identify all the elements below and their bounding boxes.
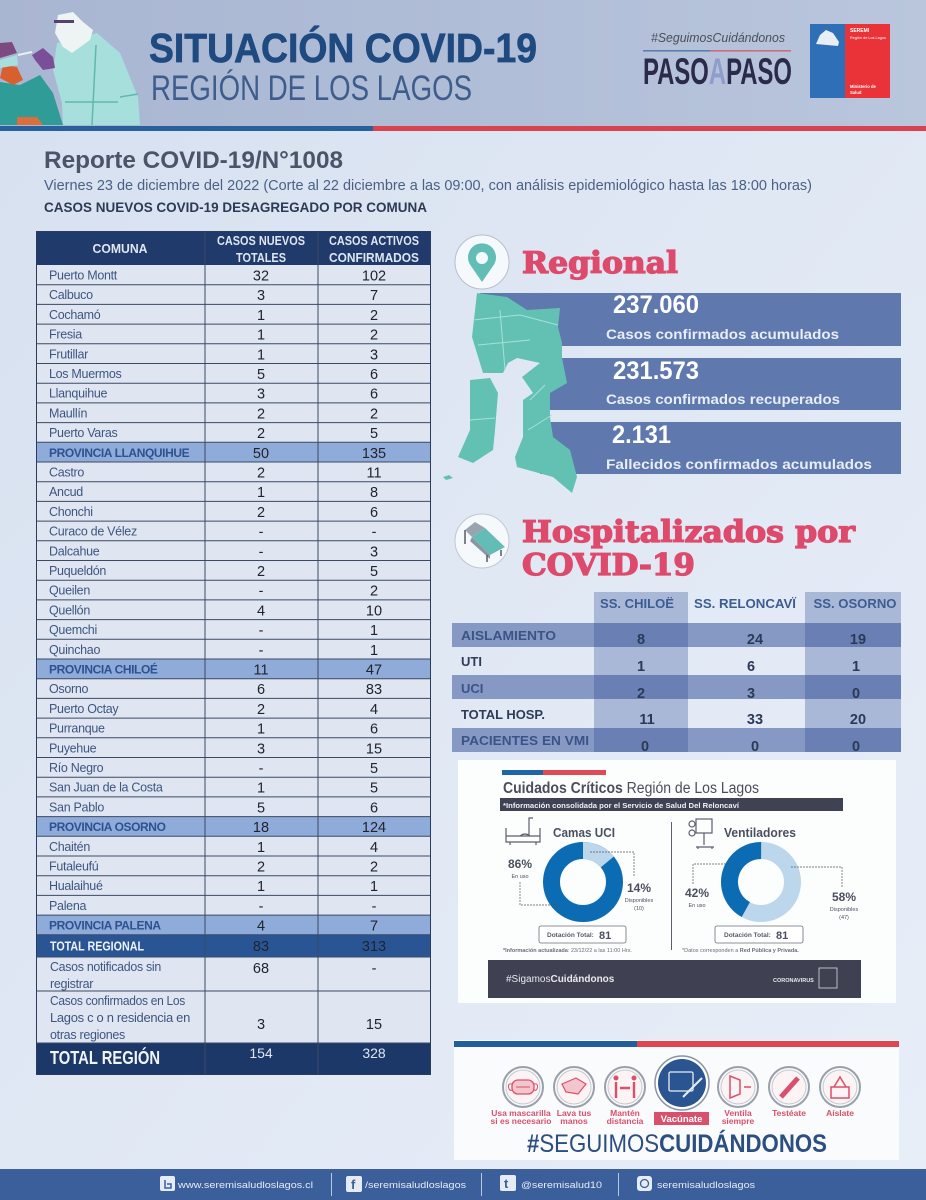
row: Cochamó: 1 (257, 308, 265, 324)
row: Ancud (49, 485, 378, 501)
title (149, 25, 537, 108)
table subtitle: CASOS NUEVOS COVID-19 DESAGREGADO POR COMUNA (44, 199, 427, 215)
stat bar: accumulated cases: 237.060 (613, 291, 699, 319)
row: San Pablo: San Pablo (49, 800, 104, 814)
row: UTI: 1 (637, 659, 645, 675)
callout: 58% available: (47) (839, 915, 849, 921)
row: Aislamiento: 19 (850, 632, 866, 648)
row: UCI: 0 (852, 686, 860, 702)
facebook: f (351, 1177, 356, 1192)
row: Quellón (49, 603, 382, 619)
row: Pacientes en VMI: PACIENTES EN VMI (461, 733, 589, 748)
row: Fresia: 2 (370, 328, 378, 344)
stat bar: deaths (540, 421, 901, 474)
stat bar: accumulated cases (480, 291, 901, 346)
row: Puerto Varas: Puerto Varas (49, 426, 117, 440)
row: Pacientes en VMI (461, 733, 860, 755)
measure labels: Testéate (772, 1108, 806, 1118)
row: Casos confirmados con residencia en otras regiones: 3 (257, 1017, 265, 1033)
row: San Juan de la Costa: San Juan de la Costa (49, 781, 163, 795)
row: Quellón: Quellón (49, 603, 90, 617)
row: Queilen (49, 584, 378, 600)
row: Quellón: 10 (366, 603, 382, 619)
table header: CONFIRMADOS (329, 251, 419, 265)
row: Provincia Osorno: 124 (362, 820, 386, 836)
heading: Hospitalizados por COVID-19: COVID-19 (522, 548, 695, 583)
row: Provincia Llanquihue (49, 446, 386, 462)
row: Puerto Montt (49, 268, 386, 284)
row: Futaleufú: 2 (257, 860, 265, 876)
row: Río Negro: 5 (370, 761, 378, 777)
row: Puqueldón: Puqueldón (49, 564, 106, 578)
row: Calbuco: Calbuco (49, 288, 93, 302)
total box: ICU beds: Dotación Total: (547, 932, 594, 939)
icon: mask (503, 1067, 543, 1107)
label: Camas UCI: Camas UCI (553, 826, 615, 840)
website: www.seremisaludloslagos.cl (177, 1180, 313, 1191)
callout: 58% available: 58% (832, 890, 856, 904)
row: Futaleufú: Futaleufú (49, 860, 99, 874)
row: Chaitén: 4 (370, 840, 378, 856)
row: Purranque: 6 (370, 722, 378, 738)
row: Casos confirmados con residencia en otras regiones (50, 994, 382, 1042)
row: Casos confirmados con residencia en otras regiones: otras regiones (50, 1028, 125, 1042)
measure labels: siempre (722, 1116, 755, 1126)
row: Cochamó (49, 308, 378, 324)
row: Los Muermos (49, 367, 378, 383)
footer: social links (0, 1169, 926, 1200)
stat bar: deaths: Fallecidos confirmados acumulados (606, 457, 872, 472)
row: Puerto Octay: Puerto Octay (49, 702, 119, 716)
row: Palena: Palena (49, 899, 86, 913)
stat bar: deaths: 2.131 (612, 421, 671, 449)
note bar: *Información consolidada por el Servicio de Salud Del Reloncaví (503, 801, 740, 810)
dark footer: CORONAVIRUS (773, 978, 814, 984)
icon: vaccine (655, 1056, 709, 1110)
instagram (637, 1176, 755, 1191)
row: UCI: 3 (747, 686, 755, 702)
row: Osorno: 83 (366, 682, 382, 698)
table header: CASOS NUEVOS (217, 234, 305, 248)
update note: *Información actualizada: 23/12/22 a las 11:00 Hrs. (503, 948, 632, 954)
callout: 14% available: 14% (627, 881, 651, 895)
row: Quemchi (49, 623, 378, 639)
measure labels: Aíslate (826, 1108, 854, 1118)
heading: Regional: Regional (522, 246, 678, 281)
row: Dalcahue (49, 544, 378, 560)
row: Los Muermos: 6 (370, 367, 378, 383)
row: Total región: 154 (249, 1045, 273, 1061)
row: Hualaihué: 1 (257, 879, 265, 895)
row: Osorno: 6 (257, 682, 265, 698)
hashtag: #SEGUIMOSCUIDÁNDONOS (527, 1129, 827, 1158)
row: San Juan de la Costa: 5 (370, 781, 378, 797)
row: Total región: TOTAL REGIÓN (50, 1047, 160, 1068)
row: Puerto Montt: Puerto Montt (49, 268, 118, 282)
row: Maullín: 2 (370, 406, 378, 422)
stat bar: recovered cases: 231.573 (613, 357, 699, 385)
row: Total hosp.: 33 (747, 712, 763, 728)
row: Frutillar: Frutillar (49, 347, 88, 361)
row: Hualaihué: Hualaihué (49, 879, 103, 893)
row: Fresia (49, 328, 378, 344)
row: Casos notificados sin registrar (50, 960, 377, 991)
logo: Seremi: SEREMI (850, 28, 870, 34)
donut: ICU beds (552, 850, 614, 914)
row: Purranque (49, 722, 378, 738)
row: Castro: 11 (366, 466, 382, 482)
row: Cochamó: 2 (370, 308, 378, 324)
panel: critical care (458, 760, 896, 1003)
stat bar: accumulated cases: Casos confirmados acumulados (606, 327, 839, 342)
row: Puerto Octay (49, 702, 378, 718)
row: Provincia Llanquihue: 135 (362, 446, 386, 462)
row: Castro: 2 (257, 466, 265, 482)
total box: ICU beds: 81 (599, 930, 611, 942)
row: UCI (461, 681, 860, 702)
row: Quemchi: Quemchi (49, 623, 97, 637)
twitter: @seremisalud10 (521, 1180, 602, 1191)
row: Pacientes en VMI: 0 (751, 739, 759, 755)
row: Aislamiento: 24 (747, 632, 763, 648)
row: Dalcahue: Dalcahue (49, 544, 100, 558)
row: Puerto Montt: 102 (362, 268, 386, 284)
row: Llanquihue (49, 387, 378, 403)
row: Total hosp.: TOTAL HOSP. (461, 707, 545, 722)
callout: 14% available (590, 852, 653, 912)
callout: 58% available: Disponibles (830, 907, 858, 913)
row: Purranque: 1 (257, 722, 265, 738)
row: Provincia Osorno (49, 820, 386, 836)
row: Total hosp.: 20 (850, 712, 866, 728)
row: Cochamó: Cochamó (49, 308, 101, 322)
icon: ventilate (718, 1067, 758, 1107)
row: Provincia Palena: 4 (257, 919, 265, 935)
row: Puerto Montt: 32 (253, 268, 269, 284)
facebook (346, 1176, 466, 1192)
callout: 86% in use: En uso (511, 874, 529, 880)
row: Chaitén: Chaitén (49, 840, 90, 854)
row: Chonchi (49, 505, 378, 521)
illustration: health workers (0, 12, 140, 125)
icon: location pin (455, 235, 509, 289)
panel: prevention measures (454, 1040, 899, 1160)
logo: Paso a Paso (643, 30, 792, 92)
row: Chonchi: Chonchi (49, 505, 93, 519)
logo: Paso a Paso: #SeguimosCuidándonos (651, 30, 785, 45)
row: Aislamiento (461, 628, 866, 648)
row: UTI: 6 (747, 659, 755, 675)
callout: 42% in use: 42% (685, 886, 709, 900)
callout: 58% available (791, 867, 858, 921)
total box: ventilators (715, 926, 803, 943)
measure labels: distancia (607, 1116, 644, 1126)
measure labels: Mantén (610, 1108, 640, 1118)
twitter (500, 1175, 602, 1191)
row: UTI (461, 654, 860, 675)
row: Provincia Chiloé (49, 662, 382, 678)
row: Puqueldón (49, 564, 378, 580)
report heading: Reporte COVID-19/N°1008 (44, 147, 343, 174)
row: Futaleufú (49, 860, 378, 876)
panel: regional (443, 235, 901, 493)
map: Los Lagos region (443, 293, 577, 493)
row: Queilen: 2 (370, 584, 378, 600)
row: San Pablo: 5 (257, 800, 265, 816)
row: Aislamiento: 8 (637, 632, 645, 648)
row: Total regional: 83 (253, 939, 269, 955)
row: Los Muermos: Los Muermos (49, 367, 121, 381)
label: Ventiladores: Ventiladores (724, 826, 796, 840)
row: San Pablo (49, 800, 378, 816)
row: Hualaihué: 1 (370, 879, 378, 895)
icon: ventilator (689, 819, 714, 849)
row: Dalcahue: - (259, 544, 264, 560)
table header: CASOS ACTIVOS (329, 234, 419, 248)
row: Llanquihue: Llanquihue (49, 387, 108, 401)
row: Río Negro: Río Negro (49, 761, 104, 775)
row: Palena: - (259, 899, 264, 915)
measure labels: Lava tus (557, 1108, 592, 1118)
row: Total hosp.: 11 (639, 712, 655, 728)
row: Provincia Osorno: PROVINCIA OSORNO (49, 820, 166, 834)
colour stripe (454, 1041, 899, 1047)
measure labels: Usa mascarilla (491, 1108, 551, 1118)
donut: ventilators (718, 839, 804, 925)
data note: *Datos corresponden a Red Pública y Privada. (682, 948, 799, 954)
divider (671, 822, 672, 950)
row: Provincia Chiloé: 47 (366, 662, 382, 678)
row: Calbuco: 3 (257, 288, 265, 304)
row: Fresia: Fresia (49, 328, 82, 342)
twitter: t (504, 1176, 509, 1191)
row: Chonchi: 6 (370, 505, 378, 521)
row: Castro (49, 466, 382, 482)
dark footer: #SigamosCuidándonos (506, 974, 615, 985)
row: Casos confirmados con residencia en otras regiones: Lagos c o n residencia en (50, 1011, 190, 1025)
row: Quemchi: - (259, 623, 264, 639)
row: Provincia Chiloé: 11 (253, 662, 269, 678)
row: Casos confirmados con residencia en otras regiones: Casos confirmados en Los (50, 994, 185, 1008)
report date: Viernes 23 de diciembre del 2022 (Corte al 22 diciembre a las 09:00, con análisis epidemiológico hasta las 18:00 horas) (44, 178, 812, 194)
row: Calbuco (49, 288, 378, 304)
callout: 86% in use: 86% (508, 857, 532, 871)
row: Río Negro: - (259, 761, 264, 777)
heading: Hospitalizados por COVID-19 (522, 515, 856, 583)
row: Provincia Palena (49, 919, 378, 935)
row: Frutillar: 3 (370, 347, 378, 363)
row: UTI: 1 (852, 659, 860, 675)
icon: wash hands (554, 1067, 594, 1107)
callout: 42% in use (685, 864, 731, 909)
row: Total regional (50, 939, 386, 955)
row: Provincia Llanquihue: 50 (253, 446, 269, 462)
row: Palena (49, 899, 377, 915)
row: Puerto Octay: 2 (257, 702, 265, 718)
row: Quinchao (49, 643, 378, 659)
website (160, 1176, 313, 1191)
table header: COMUNA (92, 242, 148, 256)
instagram: seremisaludloslagos (657, 1180, 755, 1191)
row: Total regional: TOTAL REGIONAL (50, 940, 144, 954)
hospital table header: SS. CHILOË (600, 596, 674, 611)
measure labels: manos (560, 1116, 588, 1126)
row: Osorno (49, 682, 382, 698)
row: Pacientes en VMI: 0 (641, 739, 649, 755)
facebook: /seremisaludloslagos (365, 1180, 466, 1191)
total box: ventilators: 81 (776, 930, 788, 942)
row: Curaco de Vélez (49, 525, 377, 541)
note bar (500, 798, 843, 811)
measure labels: Vacúnate (661, 1114, 702, 1125)
critical care heading: Cuidados Críticos Región de Los Lagos (503, 780, 759, 797)
hospital table header: SS. RELONCAVÏ (694, 596, 796, 611)
row: Puyehue: 3 (257, 741, 265, 757)
row: Curaco de Vélez: - (372, 525, 377, 541)
row: Frutillar: 1 (257, 347, 265, 363)
panel: hospitalised (452, 514, 901, 755)
stat bar: recovered cases (540, 357, 901, 410)
row: Llanquihue: 6 (370, 387, 378, 403)
row: Casos confirmados con residencia en otras regiones: 15 (366, 1017, 382, 1033)
row: Dalcahue: 3 (370, 544, 378, 560)
row: Queilen: Queilen (49, 584, 90, 598)
row: Ancud: Ancud (49, 485, 83, 499)
row: Palena: - (372, 899, 377, 915)
row: Chaitén (49, 840, 378, 856)
icon: isolate (820, 1067, 860, 1107)
row: Los Muermos: 5 (257, 367, 265, 383)
total box: ICU beds (539, 926, 626, 943)
header band (0, 0, 926, 126)
row: Total hosp. (461, 707, 866, 728)
row: Quinchao: - (259, 643, 264, 659)
row: Casos notificados sin registrar: Casos notificados sin (50, 960, 161, 974)
row: Queilen: - (259, 584, 264, 600)
row: Frutillar (49, 347, 378, 363)
row: Puerto Varas: 5 (370, 426, 378, 442)
row: San Juan de la Costa (49, 781, 378, 797)
row: Puerto Varas: 2 (257, 426, 265, 442)
row: Casos notificados sin registrar: 68 (253, 961, 269, 977)
row: Puqueldón: 2 (257, 564, 265, 580)
row: Provincia Chiloé: PROVINCIA CHILOÉ (49, 662, 158, 676)
title: SITUACIÓN COVID-19 (149, 25, 537, 71)
row: Quinchao: Quinchao (49, 643, 100, 657)
measure labels (491, 1108, 854, 1126)
icon: hospital bed (455, 514, 509, 568)
row: UCI: 2 (637, 686, 645, 702)
row: Chaitén: 1 (257, 840, 265, 856)
row: Puyehue: Puyehue (49, 741, 97, 755)
logo: Seremi: Región de Los Lagos (850, 36, 886, 40)
row: Llanquihue: 3 (257, 387, 265, 403)
row: Fresia: 1 (257, 328, 265, 344)
row: Curaco de Vélez: - (259, 525, 264, 541)
row: Quellón: 4 (257, 603, 265, 619)
row: UTI: UTI (461, 654, 482, 669)
colour stripe (502, 770, 606, 775)
dark footer (488, 960, 861, 998)
callout: 86% in use (508, 857, 560, 905)
row: Puqueldón: 5 (370, 564, 378, 580)
row: Total región (50, 1045, 386, 1068)
row: Puyehue: 15 (366, 741, 382, 757)
logo: Paso a Paso: PASOAPASO (643, 51, 792, 92)
row: Castro: Castro (49, 466, 84, 480)
row: Purranque: Purranque (49, 722, 105, 736)
row: Puyehue (49, 741, 382, 757)
row: Provincia Palena: 7 (370, 919, 378, 935)
row: Provincia Palena: PROVINCIA PALENA (49, 919, 161, 933)
callout: 14% available: Disponibles (625, 898, 653, 904)
title: REGIÓN DE LOS LAGOS (151, 69, 472, 108)
row: Total regional: 313 (362, 939, 386, 955)
logo: Seremi (810, 24, 890, 98)
row: Río Negro (49, 761, 378, 777)
row: Quemchi: 1 (370, 623, 378, 639)
row: Futaleufú: 2 (370, 860, 378, 876)
icon: ICU bed (506, 818, 540, 845)
row: Ancud: 1 (257, 485, 265, 501)
table header: TOTALES (236, 251, 286, 265)
row: Casos notificados sin registrar: - (372, 961, 377, 977)
measure labels: Ventila (724, 1108, 752, 1118)
row: UCI: UCI (461, 681, 483, 696)
heading: Hospitalizados por COVID-19: Hospitalizados por (522, 515, 856, 550)
row: Calbuco: 7 (370, 288, 378, 304)
table header (36, 231, 431, 265)
row: San Pablo: 6 (370, 800, 378, 816)
row: Maullín: Maullín (49, 406, 88, 420)
row: Maullín (49, 406, 378, 422)
measure labels: si es necesario (491, 1116, 551, 1126)
row: Casos notificados sin registrar: registrar (50, 977, 93, 991)
row: Chonchi: 2 (257, 505, 265, 521)
row: Provincia Llanquihue: PROVINCIA LLANQUIHUE (49, 446, 190, 460)
row: Puerto Octay: 4 (370, 702, 378, 718)
hospital table header: SS. OSORNO (814, 596, 896, 611)
row: Hualaihué (49, 879, 378, 895)
stat bar: recovered cases: Casos confirmados recuperados (606, 392, 840, 407)
row: Ancud: 8 (370, 485, 378, 501)
table: cases by comuna (36, 231, 431, 1075)
row: Provincia Osorno: 18 (253, 820, 269, 836)
row: Total región: 328 (362, 1045, 386, 1061)
row: Puerto Varas (49, 426, 378, 442)
icon: test (769, 1067, 809, 1107)
row: Curaco de Vélez: Curaco de Vélez (49, 525, 137, 539)
row: Osorno: Osorno (49, 682, 89, 696)
logo: Seremi: Ministerio de (850, 84, 876, 89)
callout: 14% available: (10) (634, 906, 644, 912)
row: San Juan de la Costa: 1 (257, 781, 265, 797)
row: Maullín: 2 (257, 406, 265, 422)
logo: Seremi: Salud (850, 90, 862, 95)
icon: keep distance (605, 1067, 645, 1107)
row: Quinchao: 1 (370, 643, 378, 659)
table: hospitalisations (452, 592, 901, 755)
callout: 42% in use: En uso (688, 903, 706, 909)
hospital table header (600, 596, 896, 611)
total box: ventilators: Dotación Total: (724, 932, 771, 939)
row: Pacientes en VMI: 0 (852, 739, 860, 755)
row: Aislamiento: AISLAMIENTO (461, 628, 556, 643)
header stripe (0, 126, 926, 131)
